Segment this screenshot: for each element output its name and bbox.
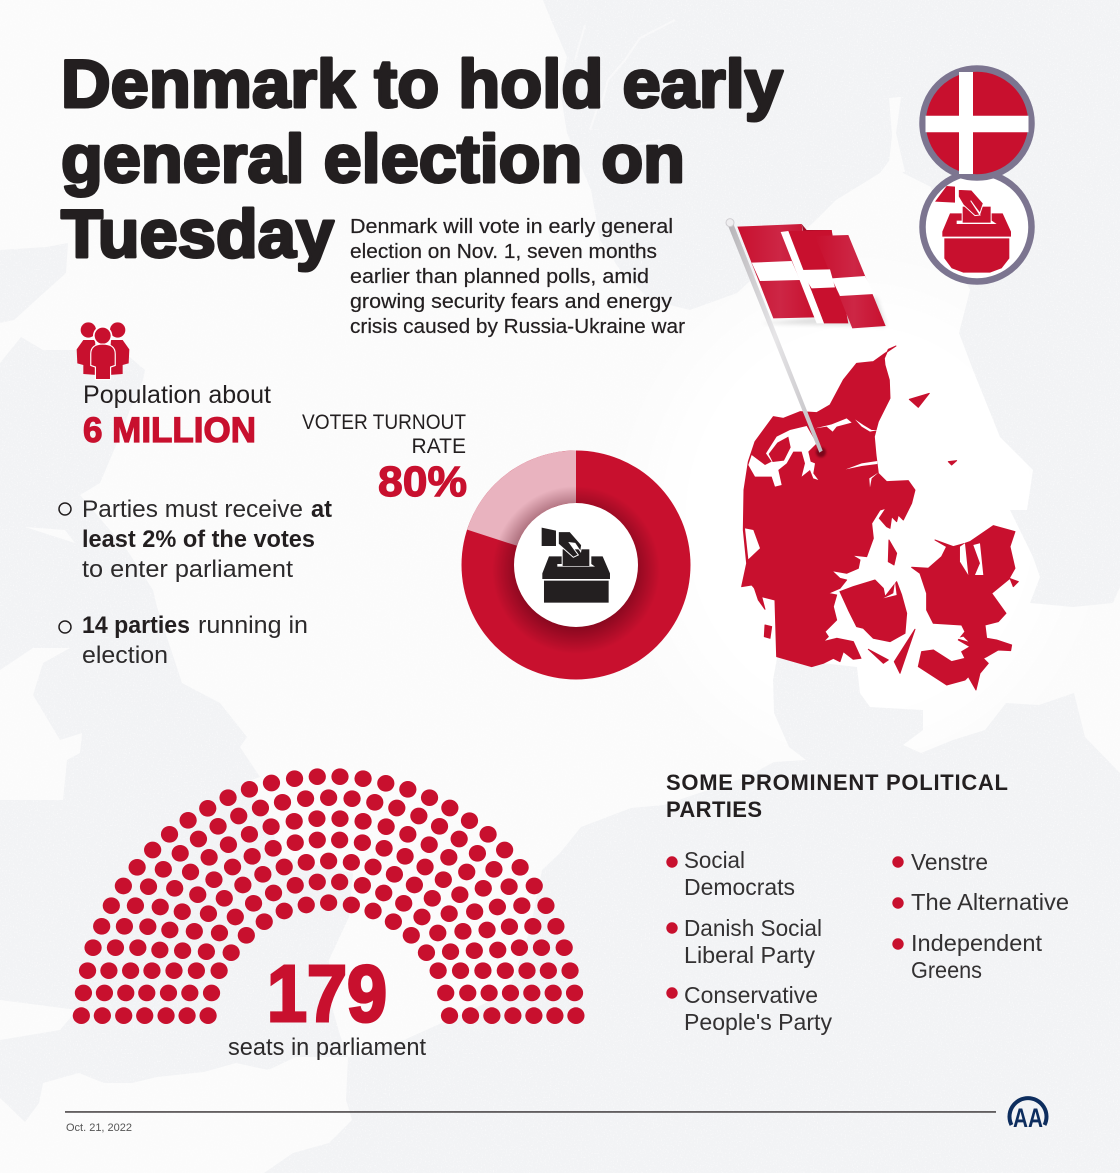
party list column 2: Greens bbox=[911, 957, 982, 983]
parties heading: PARTIES bbox=[666, 797, 762, 822]
bullet: 14 parties: running in bbox=[198, 612, 308, 639]
description text: Denmark will vote in early general bbox=[350, 216, 673, 238]
logo: AA bbox=[1010, 1098, 1046, 1133]
party list column 1: Democrats bbox=[684, 874, 795, 900]
island of Mors bbox=[769, 437, 791, 462]
population stat: 6 MILLION bbox=[83, 411, 256, 450]
description text bbox=[350, 216, 685, 338]
party list column 2: Venstre bbox=[911, 849, 988, 875]
flag on a pole bbox=[726, 219, 887, 457]
bullet: vote threshold: at bbox=[311, 496, 332, 523]
description text: earlier than planned polls, amid bbox=[350, 266, 649, 288]
icon: ballot box in circle bbox=[935, 186, 1011, 273]
party list column 1: Liberal Party bbox=[684, 942, 815, 968]
description text: growing security fears and energy bbox=[350, 291, 672, 313]
voter turnout label: RATE bbox=[412, 435, 466, 458]
party list column 2 bbox=[892, 849, 1069, 983]
bullet: vote threshold: Parties must receive bbox=[82, 496, 303, 523]
party list column 2: Independent bbox=[911, 930, 1043, 956]
donut chart: turnout 80% bbox=[462, 450, 690, 680]
description text: election on Nov. 1, seven months bbox=[350, 241, 657, 263]
voter turnout label: 80% bbox=[378, 458, 467, 506]
seat count: 179 bbox=[267, 949, 387, 1038]
title bbox=[61, 46, 783, 272]
bullet: vote threshold: least 2% of the votes bbox=[82, 526, 315, 553]
party list column 1: Danish Social bbox=[684, 915, 822, 941]
logo: AA: AA bbox=[1013, 1103, 1043, 1133]
population stat: Population about bbox=[83, 381, 271, 409]
map of Denmark bbox=[742, 346, 1018, 690]
icon: danish flag circle bbox=[922, 68, 1032, 282]
parliament seat chart bbox=[73, 768, 585, 1024]
population stat bbox=[83, 381, 271, 450]
bullet: 14 parties bbox=[59, 612, 308, 669]
title: Tuesday bbox=[61, 196, 334, 272]
icon: ballot box bbox=[542, 528, 610, 603]
title: general election on bbox=[61, 121, 685, 197]
bullet: vote threshold: to enter parliament bbox=[82, 556, 293, 583]
voter turnout label: VOTER TURNOUT bbox=[302, 411, 466, 434]
seat count: seats in parliament bbox=[228, 1034, 426, 1061]
voter turnout label bbox=[302, 411, 467, 506]
parties heading: SOME PROMINENT POLITICAL bbox=[666, 770, 1008, 795]
party list column 1: Social bbox=[684, 847, 745, 873]
party list column 2: The Alternative bbox=[911, 889, 1069, 915]
bullet: vote threshold bbox=[59, 496, 332, 583]
date: Oct. 21, 2022 bbox=[66, 1122, 132, 1134]
party list column 1: Conservative bbox=[684, 982, 818, 1008]
title: Denmark to hold early bbox=[61, 46, 783, 122]
seat count bbox=[228, 949, 426, 1061]
icon: people bbox=[77, 322, 129, 379]
bullet: 14 parties: 14 parties bbox=[82, 612, 190, 639]
description text: crisis caused by Russia-Ukraine war bbox=[350, 316, 685, 338]
parties heading bbox=[666, 770, 1008, 822]
bullet: 14 parties: election bbox=[82, 642, 168, 669]
party list column 1: People's Party bbox=[684, 1009, 832, 1035]
party list column 1 bbox=[666, 847, 832, 1035]
